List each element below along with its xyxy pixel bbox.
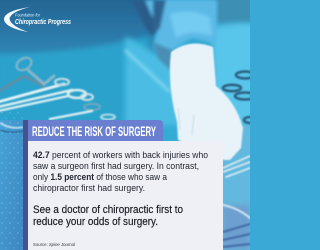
background photo: surgical table	[0, 0, 256, 250]
heading tab	[28, 120, 163, 141]
source: Source: Spine Journal	[33, 242, 76, 247]
statistics paragraph: 42.7 percent of workers with back injuries who	[33, 150, 208, 160]
panel: text card	[23, 120, 223, 250]
logo name: Chiropractic Progress	[15, 19, 71, 26]
call to action	[33, 204, 183, 228]
left strip	[0, 120, 23, 250]
statistics paragraph: saw a surgeon first had surgery. In contrast,	[33, 161, 199, 171]
logo small line: Foundation for	[15, 12, 40, 18]
dark instrument rings	[223, 72, 256, 123]
logo: Foundation for Chiropractic Progress	[4, 7, 71, 32]
call to action: See a doctor of chiropractic first to	[33, 204, 183, 216]
card body	[28, 141, 223, 250]
heading: REDUCE THE RISK OF SURGERY	[32, 123, 156, 139]
surgeon glove	[170, 43, 243, 160]
statistics paragraph: only 1.5 percent of those who saw a	[33, 172, 167, 182]
statistics paragraph	[33, 150, 208, 193]
card accent strip	[23, 120, 28, 250]
logo swoosh	[4, 7, 30, 32]
statistics paragraph: chiropractor first had surgery.	[33, 183, 145, 193]
surgeon gown sleeve	[132, 0, 217, 70]
call to action: reduce your odds of surgery.	[33, 216, 158, 228]
right strip instruments	[223, 156, 250, 247]
steel instruments	[0, 55, 115, 120]
